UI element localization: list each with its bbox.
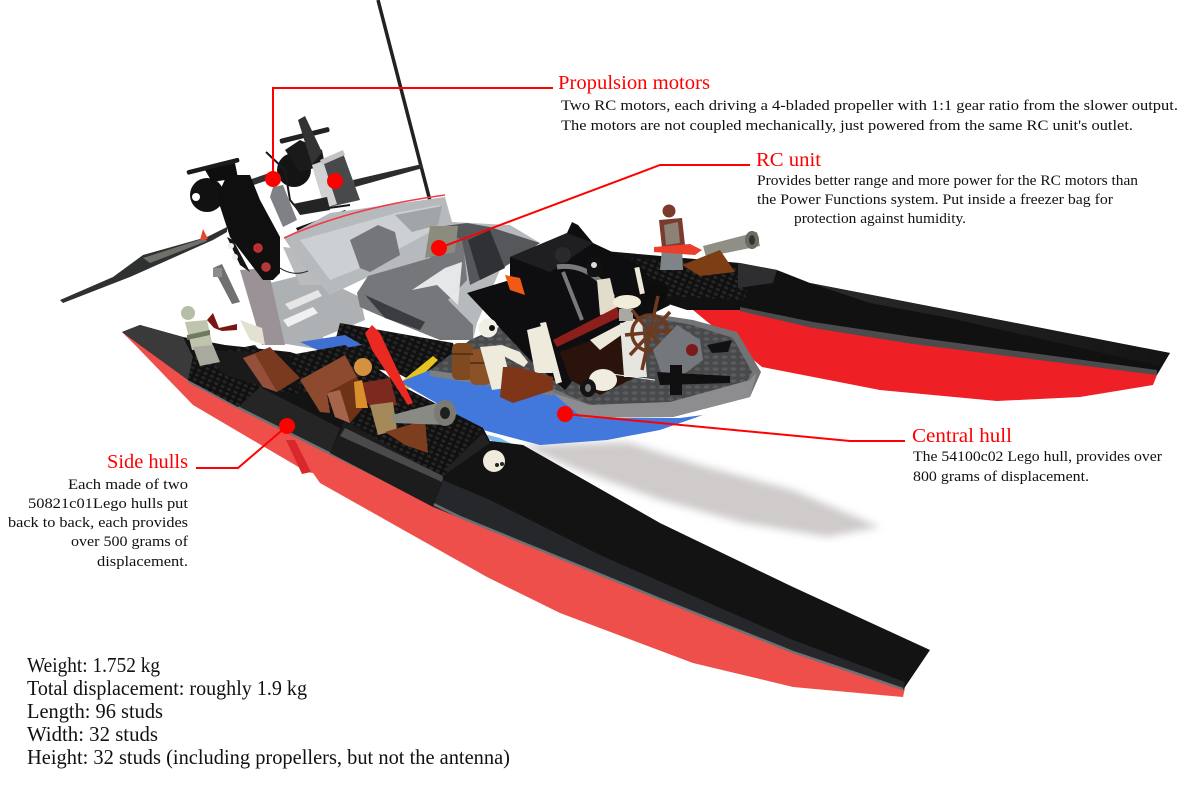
leader line [196, 426, 287, 468]
freezer bag: RC unit [284, 195, 540, 340]
specifications text block: Length: 96 studs [27, 699, 163, 723]
red propeller on left hull [365, 325, 413, 405]
description: The 54100c02 Lego hull, provides over [913, 449, 1162, 465]
left side hull red side [122, 332, 905, 697]
propeller blades [60, 164, 423, 303]
dot [557, 406, 573, 422]
heading: Side hulls [107, 451, 188, 473]
description: back to back, each provides [8, 515, 188, 531]
description: protection against humidity. [794, 211, 966, 227]
heading: Propulsion motors [558, 72, 710, 94]
description: 50821c01Lego hulls put [28, 496, 188, 512]
callout: central hull [557, 406, 1162, 485]
red pole and brown plate [500, 307, 640, 403]
dot [279, 418, 295, 434]
pirate on right hull with cannon [654, 204, 760, 276]
description: the Power Functions system. Put inside a freezer bag for [757, 192, 1113, 208]
dot: motor 2 [327, 173, 343, 189]
leader lines [273, 88, 553, 178]
small skull [483, 450, 505, 472]
pirate on left hull [354, 358, 428, 453]
rope spool [580, 369, 655, 397]
leader line [439, 165, 750, 248]
dot [431, 240, 447, 256]
central hull: blue hull [400, 370, 703, 450]
wooden crates [243, 347, 370, 423]
central black platform [300, 323, 470, 400]
ship wheel [625, 296, 677, 370]
motor right [266, 116, 360, 215]
description: Provides better range and more power for the RC motors than [757, 173, 1139, 189]
chassis [213, 185, 365, 350]
left side hull deck [122, 325, 930, 690]
boat crew: bat wings and dark figures [467, 222, 670, 395]
white captain [613, 295, 647, 377]
description [561, 98, 1178, 134]
dot: motor 1 [265, 171, 281, 187]
barrels [452, 343, 491, 385]
callout: propulsion motors [265, 72, 1178, 189]
specifications text block: Weight: 1.752 kg [27, 653, 160, 677]
grey winch [653, 325, 732, 395]
grey rim strip in front of the crew [430, 370, 553, 396]
cannon on left hull [392, 400, 457, 426]
central hull: grey rim and deck [430, 300, 761, 418]
description: Each made of two [68, 477, 188, 493]
skeleton crew [478, 318, 562, 390]
mummy figure [181, 306, 220, 366]
right side hull [593, 250, 1170, 401]
callout: RC unit [431, 149, 1139, 256]
description: 800 grams of displacement. [913, 469, 1089, 485]
specifications text block [27, 653, 510, 769]
heading: Central hull [912, 425, 1012, 447]
description: Two RC motors, each driving a 4-bladed propeller with 1:1 gear ratio from the slower output. [561, 98, 1178, 114]
motor left [186, 158, 280, 280]
description: displacement. [97, 554, 188, 570]
rear skeleton with red scorpion [207, 268, 265, 345]
ground shadow [520, 442, 880, 537]
description: over 500 grams of [71, 534, 188, 550]
leader line [565, 414, 905, 441]
description [913, 449, 1162, 485]
description [8, 477, 188, 570]
callout: side hulls [8, 418, 295, 570]
specifications text block: Total displacement: roughly 1.9 kg [27, 676, 307, 700]
antenna [378, 0, 436, 224]
specifications text block: Width: 32 studs [27, 722, 158, 746]
description [757, 173, 1139, 227]
heading: RC unit [756, 149, 821, 171]
specifications text block: Height: 32 studs (including propellers, but not the antenna) [27, 745, 510, 769]
description: The motors are not coupled mechanically, just powered from the same RC unit's outlet. [561, 118, 1133, 134]
